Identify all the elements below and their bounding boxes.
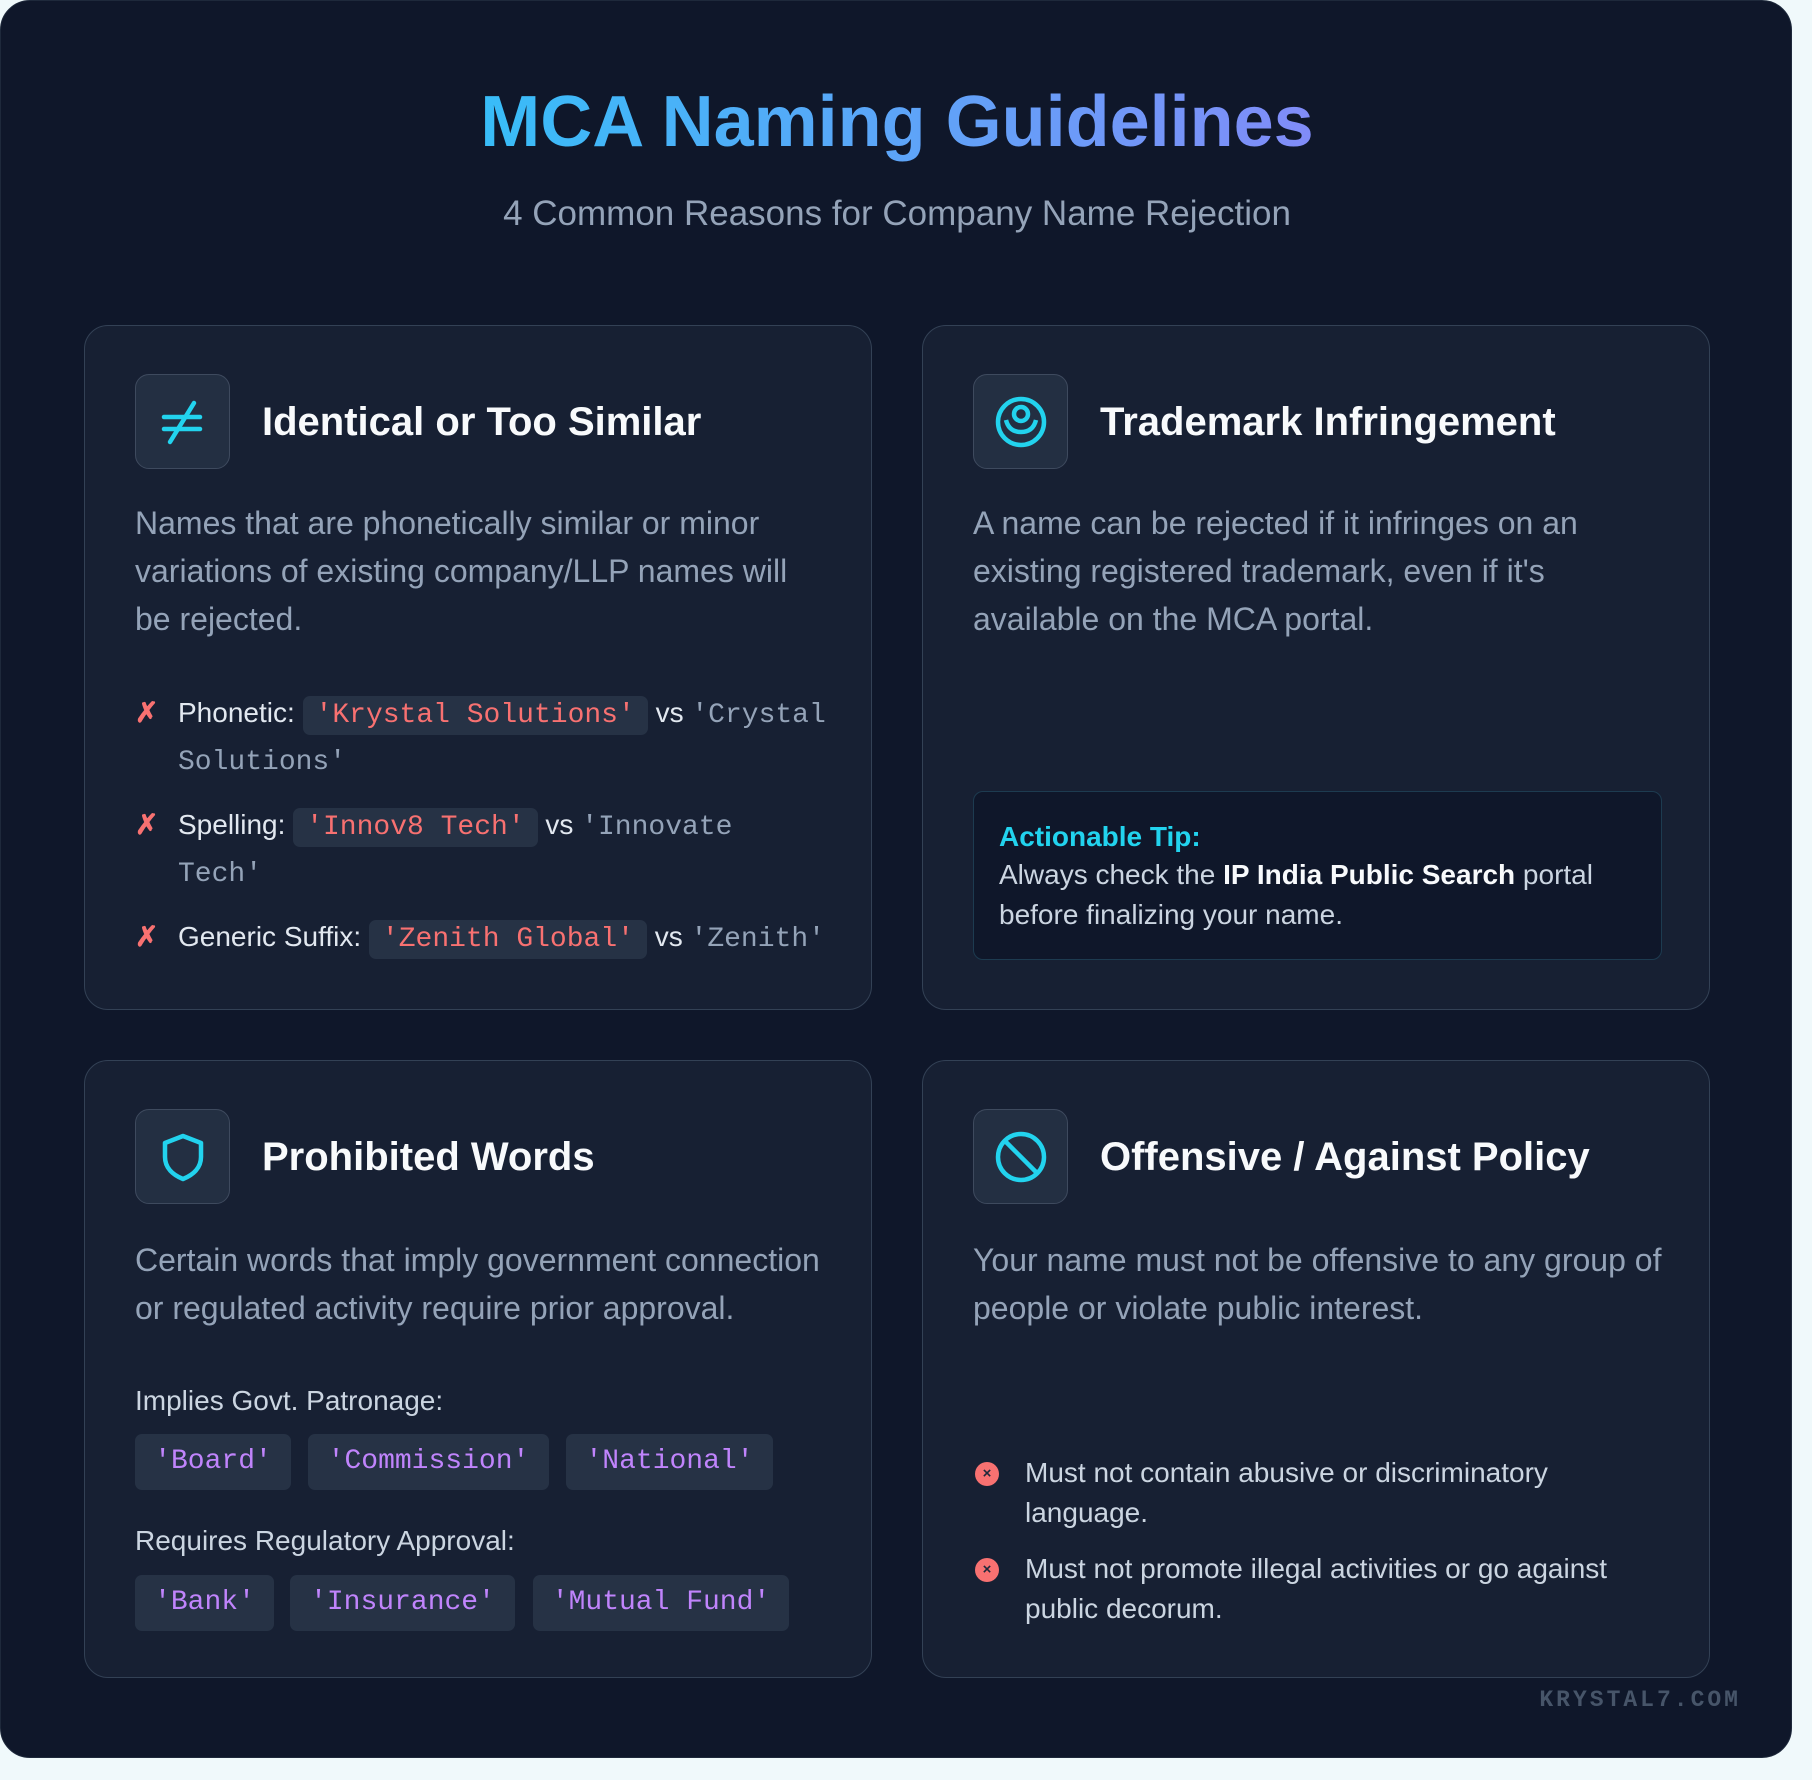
title: MCA Naming Guidelines bbox=[480, 82, 1314, 162]
tags: regulatory: 'Mutual Fund' bbox=[552, 1587, 770, 1618]
icon: trademark bbox=[973, 374, 1068, 469]
tags: regulatory bbox=[135, 1575, 789, 1631]
label: govt patronage: Implies Govt. Patronage: bbox=[135, 1385, 443, 1416]
heading: Prohibited Words bbox=[262, 1135, 595, 1179]
description: A name can be rejected if it infringes on an existing registered trademark, even if it's available on the MCA portal. bbox=[973, 505, 1578, 637]
icon: not equal bbox=[135, 374, 230, 469]
tags: regulatory: 'Bank' bbox=[154, 1587, 255, 1618]
bullets bbox=[975, 1457, 1607, 1624]
callout: actionable tip: Always check the IP India Public Search portal before finalizing your name. bbox=[999, 859, 1593, 930]
icon: ban bbox=[973, 1109, 1068, 1204]
heading: Trademark Infringement bbox=[1100, 400, 1556, 444]
item: spelling: ✗ bbox=[135, 809, 158, 840]
tags: govt: 'Commission' bbox=[328, 1446, 529, 1477]
bullet 2: Must not promote illegal activities or go against public decorum. bbox=[1025, 1553, 1607, 1624]
tags: regulatory: 'Insurance' bbox=[310, 1587, 495, 1618]
tags: govt: 'Board' bbox=[154, 1446, 272, 1477]
item: phonetic: ✗ bbox=[135, 697, 158, 728]
panel: prohibited words bbox=[84, 1060, 872, 1678]
tags: govt bbox=[135, 1434, 773, 1490]
bullets: × bbox=[983, 1561, 991, 1578]
heading: Offensive / Against Policy bbox=[1100, 1135, 1590, 1179]
item: spelling: Spelling: 'Innov8 Tech' vs 'Innovate Tech' bbox=[178, 809, 732, 890]
bullets: × bbox=[983, 1465, 991, 1482]
description: Your name must not be offensive to any group of people or violate public interest. bbox=[973, 1242, 1661, 1326]
panel: trademark infringement bbox=[922, 325, 1710, 1010]
subtitle: 4 Common Reasons for Company Name Rejection bbox=[503, 194, 1291, 233]
footer brand: KRYSTAL7.COM bbox=[1539, 1687, 1741, 1713]
bullet 1: Must not contain abusive or discriminatory language. bbox=[1025, 1457, 1548, 1528]
label: regulatory: Requires Regulatory Approval: bbox=[135, 1525, 515, 1556]
item: generic suffix: ✗ bbox=[135, 921, 158, 952]
panel: identical or too similar bbox=[84, 325, 872, 1010]
icon: shield bbox=[135, 1109, 230, 1204]
examples list bbox=[135, 696, 826, 959]
description: Names that are phonetically similar or minor variations of existing company/LLP names will be rejected. bbox=[135, 505, 787, 637]
callout: actionable tip: Actionable Tip: bbox=[999, 821, 1201, 852]
item: phonetic: Phonetic: 'Krystal Solutions' vs 'Crystal Solutions' bbox=[178, 697, 826, 778]
description: Certain words that imply government connection or regulated activity require prior approval. bbox=[135, 1242, 820, 1326]
heading: Identical or Too Similar bbox=[262, 400, 701, 444]
item: generic suffix: Generic Suffix: 'Zenith Global' vs 'Zenith' bbox=[178, 921, 825, 955]
tags: govt: 'National' bbox=[585, 1446, 754, 1477]
callout: actionable tip bbox=[973, 791, 1662, 960]
panel: offensive / against policy bbox=[922, 1060, 1710, 1678]
